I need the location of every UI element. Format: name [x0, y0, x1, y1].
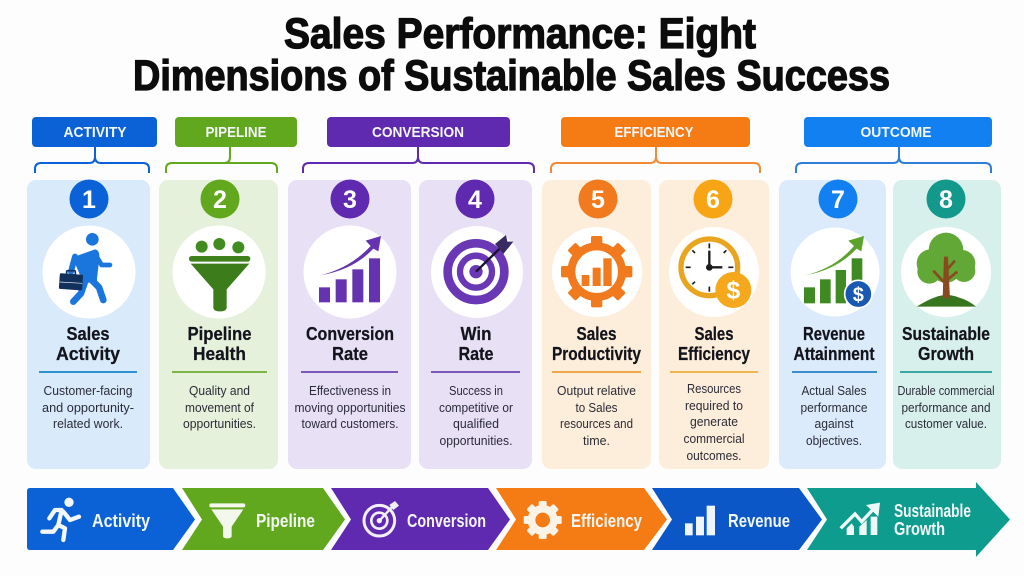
description: against — [814, 417, 854, 431]
description: Actual Sales — [802, 384, 866, 398]
panel: Sales Activity — [27, 180, 150, 469]
description: competitive or — [439, 401, 513, 415]
panel: Win Rate — [419, 180, 532, 469]
arrow: Revenue: Revenue — [728, 511, 790, 531]
description: moving opportunities — [294, 401, 406, 415]
arrow: Conversion: Conversion — [407, 511, 486, 531]
description: Quality and — [189, 384, 250, 398]
description: movement of — [185, 401, 254, 415]
description — [898, 384, 994, 431]
icon: revenue bars with coin — [804, 236, 872, 308]
arrow: Sustainable Growth: Sustainable — [894, 501, 971, 521]
heading — [678, 324, 750, 364]
panel: Sales Productivity — [542, 180, 651, 469]
icon: walking person with briefcase — [59, 233, 110, 302]
group header: Outcome — [796, 117, 992, 173]
arrow: Activity: Activity — [92, 511, 150, 531]
description — [183, 384, 256, 431]
icon: clock with coin — [681, 239, 751, 308]
panel: Sustainable Growth — [893, 180, 1001, 469]
group header: Activity: ACTIVITY — [64, 124, 126, 141]
heading: Attainment — [794, 344, 875, 364]
description: opportunities. — [440, 434, 512, 448]
group header: Activity — [32, 117, 157, 173]
arrow: Conversion — [331, 488, 510, 550]
description: required to — [685, 399, 743, 413]
heading — [188, 324, 252, 364]
description — [684, 382, 744, 463]
title: Sales Performance: Eight — [284, 10, 756, 58]
heading: Rate — [332, 344, 368, 364]
description — [42, 384, 134, 431]
heading: Sustainable — [902, 324, 990, 344]
heading: Efficiency — [678, 344, 750, 364]
icon: small gear — [524, 501, 562, 539]
heading: Win — [460, 324, 492, 344]
description: Durable commercial — [898, 384, 994, 398]
panel: Conversion Rate: 3 — [343, 186, 357, 214]
heading: Revenue — [803, 324, 865, 344]
description: commercial — [684, 432, 744, 446]
heading: Pipeline — [188, 324, 252, 344]
description — [439, 384, 513, 448]
description: Effectiveness in — [309, 384, 391, 398]
arrow: Sustainable Growth: Growth — [894, 519, 945, 539]
description: to Sales — [576, 401, 618, 415]
arrow: Efficiency — [496, 488, 667, 550]
heading — [306, 324, 394, 364]
heading — [902, 324, 990, 364]
title: Dimensions of Sustainable Sales Success — [133, 52, 890, 100]
icon: small funnel — [209, 503, 245, 538]
description: customer value. — [905, 417, 987, 431]
description: qualified — [453, 417, 499, 431]
heading: Productivity — [552, 344, 641, 364]
icon: rising bar chart — [319, 236, 381, 302]
description: objectives. — [806, 434, 862, 448]
description: time. — [583, 434, 610, 448]
description: Resources — [687, 382, 741, 396]
heading — [552, 324, 641, 364]
heading: Conversion — [306, 324, 394, 344]
group header: Efficiency: EFFICIENCY — [614, 124, 694, 141]
description: Output relative — [557, 384, 636, 398]
icon: growth chart — [841, 503, 880, 535]
description: performance and — [902, 401, 991, 415]
group header: Pipeline — [166, 117, 297, 173]
description — [557, 384, 636, 448]
icon: gear with bars — [561, 236, 632, 307]
heading — [56, 324, 120, 364]
icon: clock with coin: $ — [726, 278, 740, 305]
heading: Rate — [458, 344, 494, 364]
group header: Conversion — [303, 117, 534, 173]
icon: runner — [42, 498, 79, 540]
panel: Sustainable Growth: 8 — [939, 186, 953, 214]
group header: Efficiency — [551, 117, 760, 173]
heading: Sales — [694, 324, 734, 344]
description: outcomes. — [686, 449, 742, 463]
description: Customer-facing — [44, 384, 133, 398]
panel: Revenue Attainment — [779, 180, 886, 469]
description: performance — [800, 401, 868, 415]
icon: revenue bars with coin: $ — [853, 284, 864, 306]
panel: Pipeline Health: 2 — [213, 186, 227, 214]
heading: Sales — [576, 324, 616, 344]
icon: target with dart — [448, 235, 513, 300]
panel: Sales Efficiency: 6 — [706, 186, 720, 214]
panel: Revenue Attainment: 7 — [831, 186, 845, 214]
panel: Win Rate: 4 — [468, 186, 482, 214]
icon: small bars — [685, 506, 715, 535]
group header: Pipeline: PIPELINE — [206, 124, 266, 141]
panel: Sales Efficiency — [659, 180, 769, 469]
heading: Sales — [66, 324, 110, 344]
panel: Sales Productivity: 5 — [591, 186, 605, 214]
icon: funnel — [189, 238, 250, 311]
description: toward customers. — [302, 417, 398, 431]
arrow: Pipeline — [182, 488, 345, 550]
arrow: Activity — [27, 488, 195, 550]
description: opportunities. — [183, 417, 256, 431]
group header: Outcome: OUTCOME — [860, 124, 932, 141]
panel: Conversion Rate — [288, 180, 411, 469]
description: generate — [690, 415, 738, 429]
heading: Activity — [56, 344, 120, 364]
arrow: Efficiency: Efficiency — [571, 511, 642, 531]
heading: Health — [193, 344, 246, 364]
panel: Sales Activity: 1 — [82, 186, 96, 214]
description: related work. — [53, 417, 123, 431]
panel: Pipeline Health — [159, 180, 278, 469]
description: and opportunity- — [42, 401, 134, 415]
arrow: Revenue — [652, 488, 822, 550]
description: resources and — [560, 417, 633, 431]
description — [800, 384, 868, 448]
title — [133, 10, 890, 100]
heading — [794, 324, 875, 364]
group header: Conversion: CONVERSION — [372, 124, 464, 141]
arrow: Pipeline: Pipeline — [256, 511, 315, 531]
arrow: Sustainable Growth — [807, 482, 1010, 557]
icon: small target — [364, 501, 399, 536]
icon: tree — [917, 233, 976, 307]
heading — [458, 324, 494, 364]
description: Success in — [449, 384, 503, 398]
heading: Growth — [918, 344, 974, 364]
description — [294, 384, 406, 431]
